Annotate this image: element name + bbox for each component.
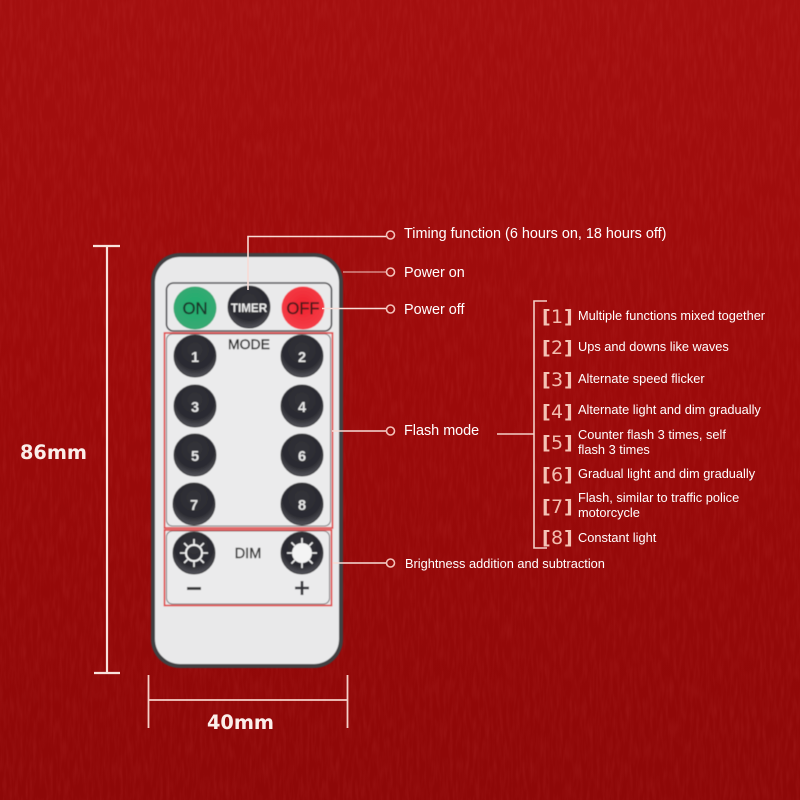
height dimension: 86mm: 86mm <box>20 441 87 464</box>
callout: power on: Power on <box>404 265 465 281</box>
item 8 <box>542 527 657 549</box>
item 5: flash 3 times <box>578 442 650 457</box>
mode buttons 1 to 8: 3 <box>191 400 199 416</box>
button: timer: TIMER <box>231 302 268 315</box>
item 5 <box>542 427 726 457</box>
button: on: ON <box>183 300 207 318</box>
callout: flash mode <box>332 423 479 439</box>
item 6: 6 <box>551 464 563 486</box>
remote control <box>153 255 341 666</box>
item 4: ] <box>564 401 573 423</box>
item 8: 8 <box>551 527 563 549</box>
item 6: [ <box>542 464 551 486</box>
item 3: 3 <box>551 369 563 391</box>
mode buttons 1 to 8: 5 <box>191 449 199 465</box>
item 2: ] <box>564 337 573 359</box>
item 7: ] <box>564 496 573 518</box>
item 7: [ <box>542 496 551 518</box>
brightness button group <box>164 530 332 606</box>
callout: timing function: Timing function (6 hours on, 18 hours off) <box>404 226 666 242</box>
item 6: ] <box>564 464 573 486</box>
symbol: plus <box>295 581 309 595</box>
width dimension: 40mm <box>148 675 348 734</box>
top button group: on, timer, off <box>166 283 332 331</box>
symbol: minus <box>187 587 201 590</box>
item 3: [ <box>542 369 551 391</box>
item 7: Flash, similar to traffic police <box>578 490 739 505</box>
item 1: ] <box>564 306 573 328</box>
item 2: 2 <box>551 337 563 359</box>
list bracket <box>497 301 547 548</box>
item 3: Alternate speed flicker <box>578 371 705 386</box>
mode buttons 1 to 8: 7 <box>190 498 198 514</box>
callout: power off: Power off <box>404 302 466 318</box>
item 1: 1 <box>551 306 563 328</box>
button: timer <box>228 286 270 328</box>
mode buttons 1 to 8: 8 <box>298 498 306 514</box>
item 1: Multiple functions mixed together <box>578 308 766 323</box>
item 7: motorcycle <box>578 505 640 520</box>
item 8: [ <box>542 527 551 549</box>
item 7: 7 <box>551 496 563 518</box>
callout: brightness addition and subtraction: Brightness addition and subtraction <box>405 556 605 571</box>
item 4: Alternate light and dim gradually <box>578 402 761 417</box>
callout: timing function <box>248 226 666 290</box>
item 8: Constant light <box>578 530 657 545</box>
item 7 <box>542 490 739 520</box>
mode buttons 1 to 8: 4 <box>298 400 306 416</box>
item 3: ] <box>564 369 573 391</box>
item 8: ] <box>564 527 573 549</box>
mode buttons 1 to 8: 6 <box>298 449 306 465</box>
flash mode button group <box>164 333 332 528</box>
item 4: 4 <box>551 401 563 423</box>
item 2 <box>542 337 729 359</box>
mode buttons 1 to 8 <box>173 335 323 525</box>
item 3 <box>542 369 705 391</box>
button: off: OFF <box>286 300 320 318</box>
button: dim plus <box>281 532 323 574</box>
mode buttons 1 to 8: 1 <box>191 350 199 366</box>
item 5: 5 <box>551 432 563 454</box>
height dimension: 86mm <box>20 246 120 673</box>
flash mode list <box>497 301 766 549</box>
label: mode: MODE <box>228 336 270 352</box>
button: dim minus <box>173 532 215 574</box>
width dimension: 40mm: 40mm <box>207 711 274 734</box>
label: dim: DIM <box>235 546 261 562</box>
item 5: [ <box>542 432 551 454</box>
item 5: Counter flash 3 times, self <box>578 427 726 442</box>
item 1 <box>542 306 766 328</box>
item 2: [ <box>542 337 551 359</box>
item 2: Ups and downs like waves <box>578 339 729 354</box>
item 6: Gradual light and dim gradually <box>578 466 756 481</box>
button: off <box>282 286 324 330</box>
item 6 <box>542 464 756 486</box>
remote body <box>153 255 341 666</box>
item 4 <box>542 401 761 423</box>
button: on <box>174 286 216 330</box>
item 5: ] <box>564 432 573 454</box>
mode buttons 1 to 8: 2 <box>298 350 306 366</box>
item 4: [ <box>542 401 551 423</box>
callout: power off <box>322 302 466 318</box>
callout: power on <box>343 265 465 281</box>
callout: flash mode: Flash mode <box>404 423 479 439</box>
item 1: [ <box>542 306 551 328</box>
